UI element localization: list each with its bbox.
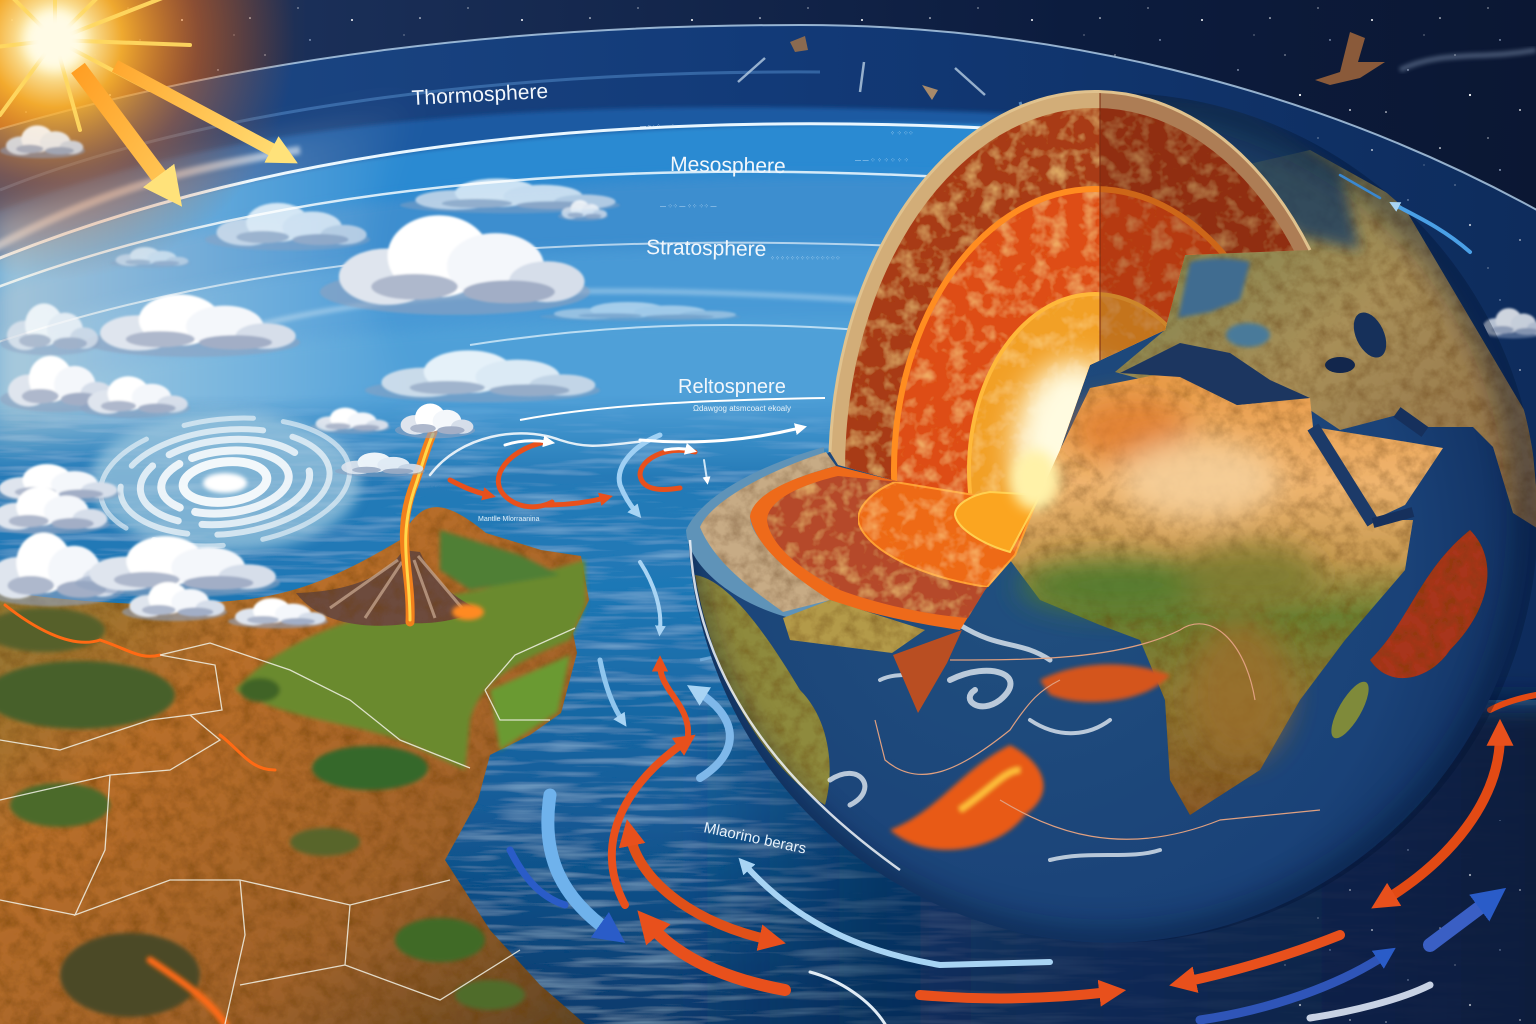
- middle orange floor: [858, 482, 1035, 587]
- continent: Africa and Arabia: [1010, 372, 1443, 815]
- red floor: [767, 476, 1035, 618]
- label: Stratosphere: Stratosphere: [646, 236, 767, 261]
- core glow: [1013, 360, 1137, 536]
- volcano: [296, 404, 484, 626]
- cyclone: [90, 406, 360, 558]
- globe ocean: [688, 147, 1502, 943]
- mantle: [845, 108, 1345, 832]
- dark sea behind globe: [680, 700, 1536, 1024]
- lava fissures: [5, 605, 275, 1024]
- space debris and satellite: [738, 32, 1536, 100]
- orbit arrows at upper right: [1340, 175, 1470, 252]
- Madagascar: [1331, 682, 1369, 738]
- rim shade: [680, 93, 1530, 943]
- green vegetation: [0, 530, 586, 1017]
- stars over lower right: [1280, 820, 1536, 1024]
- label: Mlaorino berars: Mlaorino berars: [702, 819, 808, 858]
- Persian Gulf: [1325, 357, 1355, 373]
- dome crust edge: [830, 91, 1310, 452]
- Mediterranean Sea: [1120, 343, 1310, 405]
- label: Reltospnere: Reltospnere: [678, 376, 786, 398]
- low clouds over the land: [0, 464, 328, 628]
- route lines: [875, 624, 1320, 839]
- Gulf of Aden: [1373, 512, 1413, 523]
- sub-label under Reltospnere: Ωdawgog atsmcoact ekoaly: [693, 404, 791, 413]
- cloud swirls: [830, 625, 1160, 860]
- interior dome: [827, 80, 1363, 854]
- South America sliver: [695, 575, 830, 805]
- label: Thormosphere: Thormosphere: [411, 80, 549, 110]
- eruption plume: [395, 404, 475, 438]
- inner core: [971, 296, 1219, 644]
- interior floor plate: [686, 447, 1059, 630]
- ocean: [0, 395, 1536, 1024]
- land: [0, 507, 589, 1024]
- outer core ring: [891, 186, 1299, 754]
- label: Mesosphere: Mesosphere: [670, 153, 786, 178]
- tropopause line: [520, 398, 825, 420]
- European Atlantic water: [1178, 258, 1250, 318]
- tiny atmosphere annotations: ⁘ ⁘ ⁘⁘: [890, 131, 913, 137]
- Saharan highlights: [1020, 400, 1320, 760]
- wedge shade: [1100, 80, 1320, 370]
- crust rim: [827, 86, 1363, 854]
- inner core ring: [967, 292, 1223, 648]
- ocean current arrows: [430, 428, 1536, 1024]
- Caspian Sea: [1354, 312, 1386, 358]
- border lines: [0, 628, 575, 1024]
- lower shell rim line: [690, 540, 900, 870]
- wedge divider: [1099, 88, 1101, 365]
- Black Sea area: [1226, 323, 1270, 347]
- tiny current annotation: Mantlle Mlorraanina: [478, 516, 540, 523]
- continent: Eurasia: [1115, 150, 1536, 530]
- shell rim: [686, 447, 830, 618]
- tiny atmosphere annotations: ⁘⁘⁘⁘⁘⁘⁘⁘⁘⁘⁘⁘⁘⁘: [770, 256, 840, 262]
- floor glow: [1011, 450, 1059, 510]
- clouds: [0, 125, 1536, 434]
- lava patch: east ocean: [1370, 530, 1487, 678]
- beige crust plate: [700, 452, 836, 612]
- outer core: [897, 192, 1293, 748]
- tiny atmosphere annotations: — — ⁘ ⁘ ⁘ ⁘ ⁘ ⁘: [855, 158, 909, 164]
- orange rock block: [893, 630, 962, 713]
- crust wedge: [783, 600, 925, 653]
- sun: [0, 0, 295, 280]
- lava patch: south ocean: [890, 664, 1170, 850]
- Red Sea: [1313, 427, 1373, 523]
- Gulf of Oman: [1397, 412, 1425, 432]
- orange ring: [750, 466, 1035, 630]
- tiny atmosphere annotations: [640, 124, 913, 262]
- dark northern water: [1244, 150, 1366, 256]
- solar ray arrows: [78, 66, 282, 188]
- tiny atmosphere annotations: — ⁘⁘ — ⁘⁘ ⁘⁘ —: [660, 204, 716, 210]
- tiny atmosphere annotations: — ~ ᐧ ⁘ — ⁘: [640, 124, 675, 130]
- inner yellow floor: [955, 492, 1040, 552]
- atmosphere halo arc: [700, 102, 1042, 660]
- globe: Earth cutaway: [680, 80, 1536, 943]
